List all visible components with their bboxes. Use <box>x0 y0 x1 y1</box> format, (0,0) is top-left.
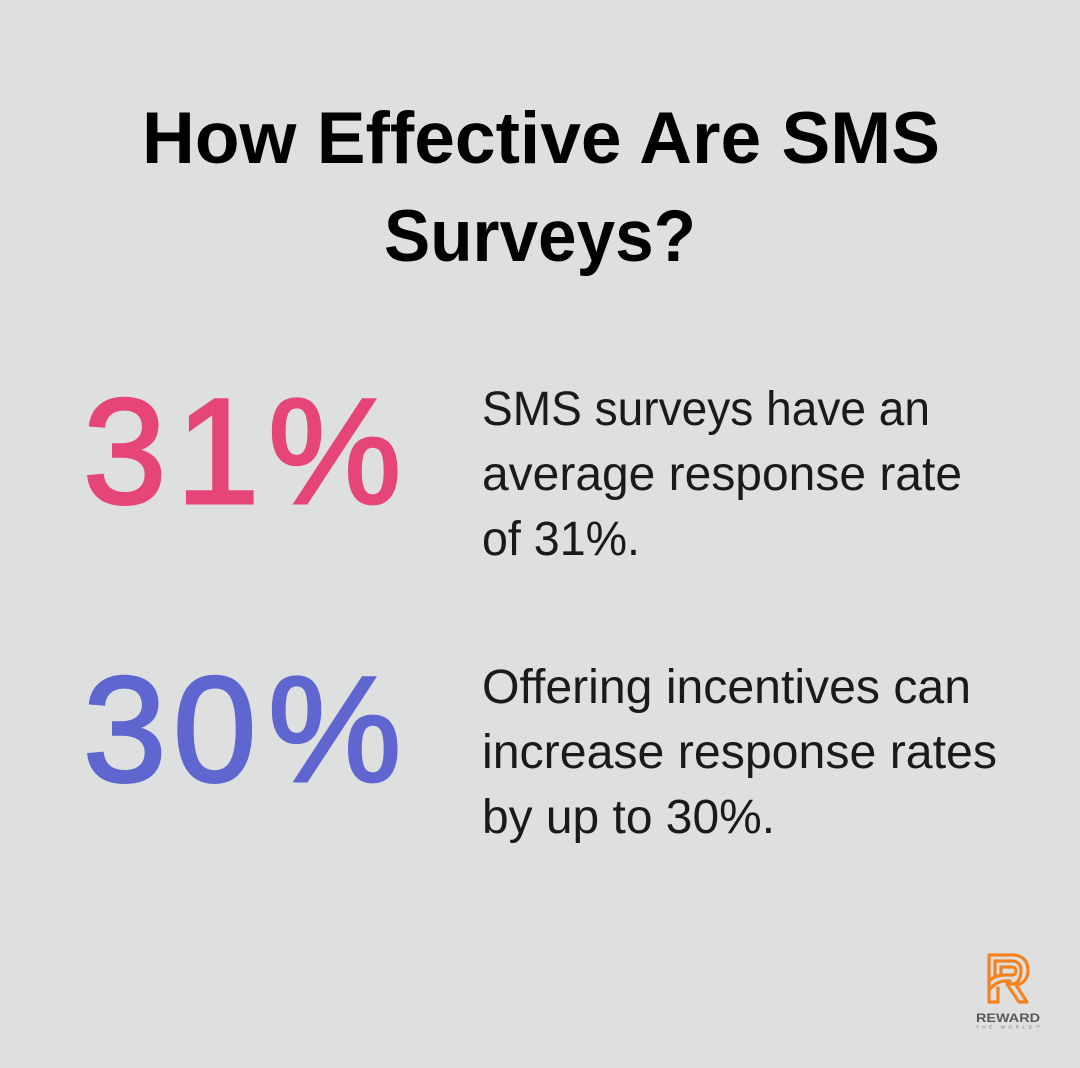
text block: response rate <box>482 383 962 566</box>
text block: response rate: of 31%. <box>482 513 640 566</box>
logo: Reward the World <box>976 955 1040 1030</box>
text block: incentives <box>482 661 997 844</box>
text block: incentives: increase response rates <box>482 726 997 779</box>
tagline: THE WORLD™ <box>976 1024 1040 1030</box>
title: How Effective Are SMS <box>142 98 940 179</box>
text block: response rate: SMS surveys have an <box>482 383 930 436</box>
title: Surveys? <box>384 196 696 277</box>
stat: 30%: 30% <box>83 645 401 813</box>
stat: 31%: 31% <box>83 367 401 535</box>
wordmark: REWARD <box>976 1011 1040 1025</box>
title <box>142 98 940 277</box>
text block: incentives: Offering incentives can <box>482 661 971 714</box>
text block: incentives: by up to 30%. <box>482 791 775 844</box>
text block: response rate: average response rate <box>482 448 962 501</box>
icon: orange R <box>989 955 1028 1002</box>
